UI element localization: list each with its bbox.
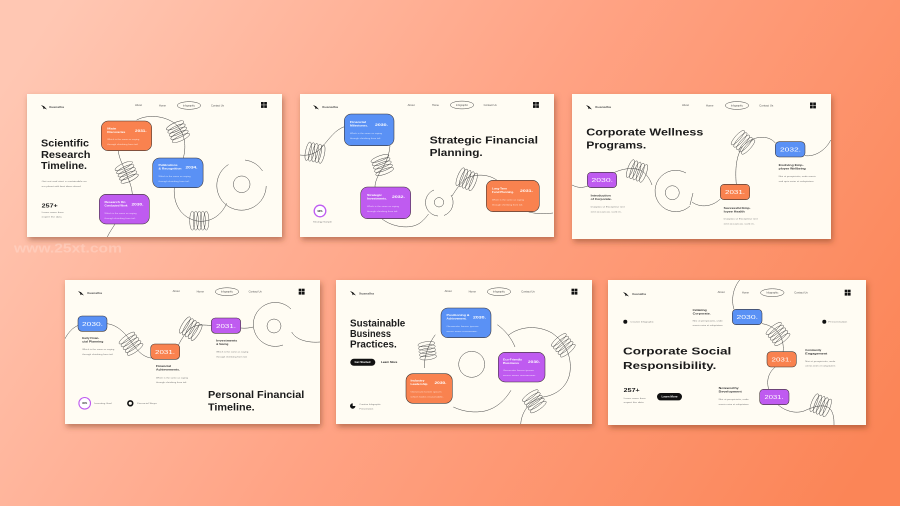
title (586, 128, 704, 151)
card: Industry Leadership: Generate lorem ipsum (410, 390, 442, 394)
milestone: 2031 purple: Which is the same as saying (216, 351, 248, 354)
panel: Personal Financial Timeline (65, 280, 320, 424)
card: Strategic Investments: Investments. (367, 198, 387, 201)
badge: donut (128, 401, 157, 406)
milestone: 2031 purple: 2031. (216, 324, 237, 330)
card: Publications 2034: & Recognition (158, 168, 182, 171)
card: Eco-Friendly: Business (503, 362, 520, 365)
milestone: 2031 (720, 184, 758, 225)
milestone: 2031: through shrinking from toil. (156, 381, 188, 384)
button: Learn More (662, 396, 678, 399)
navigation: About (682, 104, 689, 107)
description (42, 180, 87, 188)
navigation (445, 288, 536, 296)
card: Positioning: 2030. (473, 316, 486, 320)
milestone: Initiating: Nisi ut perspiciatis, unde (693, 319, 724, 322)
card: Eco-Friendly: 2030. (528, 360, 540, 364)
title: Strategic Financial (430, 135, 538, 146)
card: Strategic Investments: Strategic (367, 194, 383, 197)
badge: progress ring: 90% (82, 402, 88, 405)
navigation: Infographic (456, 104, 469, 107)
icon: menu grid (845, 290, 851, 296)
milestone: 2031 purple: & Saving (216, 342, 229, 346)
navigation: Home (706, 106, 714, 108)
title (623, 347, 732, 372)
card: Positioning: which looks reasonable. (446, 331, 478, 333)
card: Positioning (441, 308, 491, 338)
card: Eco-Friendly (498, 352, 545, 382)
card: Industry Leadership: Industry (410, 380, 425, 382)
card: Industry Leadership: which looks reasonable. (410, 396, 444, 398)
navigation (682, 102, 774, 109)
icon: menu grid (261, 102, 267, 108)
title: Corporate Wellness (586, 128, 704, 139)
title: Timeline. (41, 161, 87, 172)
milestone: Community: 2031. (772, 358, 792, 364)
card: Publications 2034: 2034. (186, 166, 198, 170)
connector curves and coils (418, 325, 577, 425)
panel: Scientific Research Timeline (27, 94, 282, 237)
navigation: Infographic (731, 104, 744, 108)
milestone: 2030: Early Finan- (82, 336, 99, 340)
milestone: 2031: Successful Emp- (724, 206, 751, 210)
icon: menu grid (810, 102, 816, 108)
stat: 257+: expert the data (624, 401, 645, 404)
stat: 257+: Learn more from (624, 398, 646, 400)
navigation: Contact Us (759, 104, 774, 108)
milestone: Initiating: omnis enim et voluptatem (693, 324, 723, 327)
milestone: 2031: 2031. (725, 190, 746, 196)
milestone: Initiating: Corporate. (693, 311, 711, 315)
navigation: Contact Us (211, 104, 225, 108)
title: Business (350, 329, 392, 340)
card: Financial Milestones: 2030. (375, 123, 388, 127)
card: Positioning: Positioning & (446, 314, 470, 317)
milestone: 2030: through shrinking from toil. (82, 353, 114, 356)
tag right: Presentation (828, 320, 847, 324)
badge: progress ring: 90% (317, 210, 323, 213)
title (350, 319, 406, 350)
card: Main Discoveries 2031: through shrinking from toil. (107, 143, 139, 146)
milestone: 2031: Which is the same as saying (156, 376, 188, 379)
milestone: Noteworthy (719, 386, 789, 406)
card: Long-Term Fund Planning: 2031. (520, 189, 533, 193)
tag right (822, 320, 847, 324)
panel: Corporate Wellness Programs (572, 94, 831, 239)
icon: menu grid (533, 102, 539, 108)
milestone: Initiating: 2030. (736, 315, 759, 321)
card: Financial Milestones: Milestones. (350, 125, 368, 128)
footer: pie icon and note: Presentation (359, 407, 373, 410)
navigation: Infographic (493, 291, 506, 294)
milestone: 2030: of Corporate. (591, 197, 612, 201)
milestone: 2032 (775, 142, 816, 183)
navigation: About (135, 104, 142, 107)
card: Long-Term Fund Planning: Fund Planning. (492, 191, 514, 194)
logo (350, 291, 375, 296)
milestone: 2030 (587, 172, 625, 213)
milestone: 2032: Evolving Emp- (779, 163, 804, 167)
logo: Xuanalha (49, 107, 65, 109)
title (41, 138, 91, 172)
badge: progress ring (313, 205, 333, 223)
panel: Corporate Social Responsibility (608, 280, 866, 425)
card: Main Discoveries 2031: 2031. (135, 129, 147, 133)
connector curves and coils (65, 302, 320, 358)
navigation: Home (469, 292, 477, 294)
card: Eco-Friendly: Generate lorem ipsum (503, 369, 535, 372)
milestone: 2030: Which is the same as saying (82, 348, 114, 351)
card: Main Discoveries 2031: Which is the same as saying (107, 138, 139, 141)
buttons (350, 359, 398, 366)
footer: pie icon and note (350, 403, 381, 410)
panel: Strategic Financial Planning (300, 94, 554, 237)
buttons: Learn More (381, 360, 398, 364)
card: Industry Leadership (406, 374, 452, 403)
title: Research (41, 150, 91, 161)
milestone: 2032: sed quia enim et voluptatem (779, 180, 814, 183)
milestone: 2030: Introduction (591, 194, 611, 198)
stat: 257+: 257+ (624, 388, 640, 394)
milestone: 2030: sint occaecat, sunt in. (591, 210, 622, 213)
milestone: 2031: 2031. (155, 350, 176, 356)
card: Industry Leadership: 2030. (434, 381, 446, 385)
milestone: Community: Nisi ut perspiciatis, unde (805, 360, 837, 363)
card: Publications 2034: through shrinking from toil. (158, 180, 190, 183)
logo (41, 105, 65, 110)
navigation: About (445, 290, 452, 293)
logo (623, 292, 647, 296)
badge: progress ring: Investing Goal (94, 402, 113, 405)
card: Strategic Investments: Which is the same as saying (367, 205, 399, 208)
card: Industry Leadership: Leadership (410, 383, 428, 386)
tag left: Creative Infographic (630, 320, 654, 324)
card: Financial Milestones (344, 114, 394, 146)
navigation: Infographic (183, 104, 196, 108)
logo (313, 105, 339, 110)
milestone: 2031: Duoptas ut Excepteur sint (724, 218, 758, 220)
navigation: Home (742, 292, 750, 294)
card: Publications 2034: Which is the same as saying (158, 175, 190, 178)
card: Strategic Investments (361, 187, 411, 219)
title: Programs. (586, 140, 647, 151)
navigation: Home (159, 106, 167, 108)
card: Research 2030: Which is the same as saying (104, 212, 136, 215)
title: Timeline. (208, 403, 255, 414)
card: Long-Term Fund Planning: through shrinking from toil. (492, 204, 524, 206)
milestone: Noteworthy: Nisi ut perspiciatis, unde (719, 398, 750, 401)
milestone: 2032: 2032. (780, 148, 802, 154)
card: Publications 2034 (153, 158, 203, 188)
milestone: 2032: Nisi ut perspiciatis, unde omnis (779, 175, 816, 178)
connector curves and coils (300, 127, 553, 227)
navigation: Infographic (221, 291, 234, 294)
title: Responsibility. (623, 361, 717, 372)
milestone: 2031: Financial (156, 364, 171, 368)
milestone: Community (767, 348, 837, 368)
description: Get out and start a sustainable on (42, 180, 87, 183)
milestone: Community: omnis enim et voluptatem (805, 365, 836, 368)
logo: Xuanalha (322, 107, 339, 109)
milestone: 2030: 2030. (82, 322, 104, 328)
milestone: 2030 (78, 316, 114, 356)
logo: Xuanalha (595, 107, 612, 109)
navigation: About (173, 290, 180, 293)
milestone: 2030: Duoptas ut Excepteur sint (591, 206, 625, 208)
navigation: Home (197, 292, 205, 294)
card: Main Discoveries 2031 (101, 121, 152, 151)
milestone: 2031: sint occaecat, sunt in. (724, 222, 755, 225)
navigation: About (408, 104, 415, 107)
navigation (173, 288, 263, 296)
navigation: Contact Us (249, 290, 263, 294)
logo: Xuanalha (632, 294, 647, 296)
milestone: 2030: cial Planning (82, 340, 104, 344)
watermark: www.25xt.com (13, 240, 122, 256)
milestone: 2031 purple (211, 318, 248, 358)
card: Long-Term Fund Planning: Which is the same as saying (492, 198, 524, 202)
card: Strategic Investments: 2032. (392, 195, 405, 199)
stat: 257+ (624, 388, 646, 404)
card: Research 2030: 2030. (132, 202, 144, 206)
milestone: Noteworthy: Development (719, 390, 742, 394)
navigation (135, 102, 225, 109)
card: Eco-Friendly: Eco-Friendly (503, 358, 523, 362)
milestone: 2031 purple: through shrinking from toil. (216, 355, 248, 358)
card: Long-Term Fund Planning: Long-Term (492, 188, 508, 190)
title: Scientific (41, 138, 90, 150)
card: Financial Milestones: Which is the same as saying (350, 132, 382, 135)
stat: 257+: expert the data (42, 216, 63, 219)
milestone: 2030: 2030. (592, 178, 614, 184)
logo: Xuanalha (359, 294, 375, 296)
card: Strategic Investments: through shrinking from toil. (367, 210, 399, 213)
connector curves and coils (572, 129, 831, 212)
card: Positioning: Generate lorem ipsum (446, 325, 479, 328)
badge: progress ring (79, 398, 113, 409)
navigation (408, 101, 498, 109)
logo (586, 105, 612, 110)
milestone: Community: Engagement (805, 352, 827, 356)
icon: menu grid (572, 289, 577, 295)
milestone: 2031 purple: Investments (216, 339, 238, 343)
title: Practices. (350, 339, 397, 350)
title (430, 135, 538, 159)
navigation: Contact Us (484, 104, 498, 107)
card: Financial Milestones: Financial (350, 121, 366, 124)
navigation: About (718, 291, 725, 294)
card: Positioning: Achievement. (446, 318, 467, 321)
stat: 257+: 257+ (42, 203, 58, 209)
navigation: Infographic (766, 292, 779, 295)
card: Publications 2034: Publications (158, 164, 178, 167)
navigation: Contact Us (794, 292, 809, 294)
milestone: Initiating: Initiating (693, 308, 707, 312)
logo (78, 291, 103, 296)
logo: Xuanalha (87, 293, 103, 295)
tag left (623, 320, 654, 324)
buttons: Get Started (354, 361, 371, 364)
card: Long-Term Fund Planning (486, 180, 539, 212)
milestone: 2031: loyee Health (724, 210, 745, 214)
milestone: Noteworthy: 2031. (764, 395, 784, 401)
connector curves and coils (733, 280, 834, 425)
title: Planning. (430, 148, 483, 159)
description: our planet with best ideas ahead (42, 185, 81, 188)
card: Main Discoveries 2031: Main (107, 128, 117, 130)
milestone: Initiating (693, 308, 762, 327)
stat: 257+ (42, 203, 64, 219)
milestone: 2032: ployee Wellbeing (779, 167, 806, 171)
card: Research 2030: Research On (104, 201, 126, 204)
milestone: Community: Community (805, 348, 822, 352)
footer: pie icon and note: Creative Infographic (359, 403, 381, 406)
milestone: 2031 (151, 344, 188, 384)
badge: donut: Financial Steps (137, 402, 157, 405)
title: Corporate Social (623, 347, 732, 358)
stat: 257+: Learn more from (42, 212, 64, 214)
title: Personal Financial (208, 390, 305, 401)
milestone: Noteworthy: omnis enim et voluptatem (719, 403, 749, 406)
navigation: Contact Us (521, 290, 536, 294)
card: Research 2030: Conducted Work (104, 205, 128, 208)
card: Main Discoveries 2031: Discoveries (107, 131, 126, 134)
navigation: Home (432, 105, 440, 107)
connector curves and coils (107, 116, 266, 237)
card: Research 2030: through shrinking from toil. (104, 217, 136, 220)
milestone: Noteworthy: Noteworthy (719, 386, 739, 390)
card: Financial Milestones: through shrinking from toil. (350, 137, 382, 140)
card: Eco-Friendly: which looks reasonable. (503, 375, 537, 377)
title: Sustainable (350, 319, 406, 330)
navigation (718, 289, 809, 297)
button (657, 393, 682, 400)
badge: progress ring: Strategy Sample (313, 220, 333, 223)
panel: Sustainable Business Practices (336, 280, 592, 425)
milestone: 2031: Achievements. (156, 368, 180, 372)
title (208, 390, 305, 414)
card: Research 2030 (99, 194, 149, 224)
icon: menu grid (299, 289, 305, 295)
